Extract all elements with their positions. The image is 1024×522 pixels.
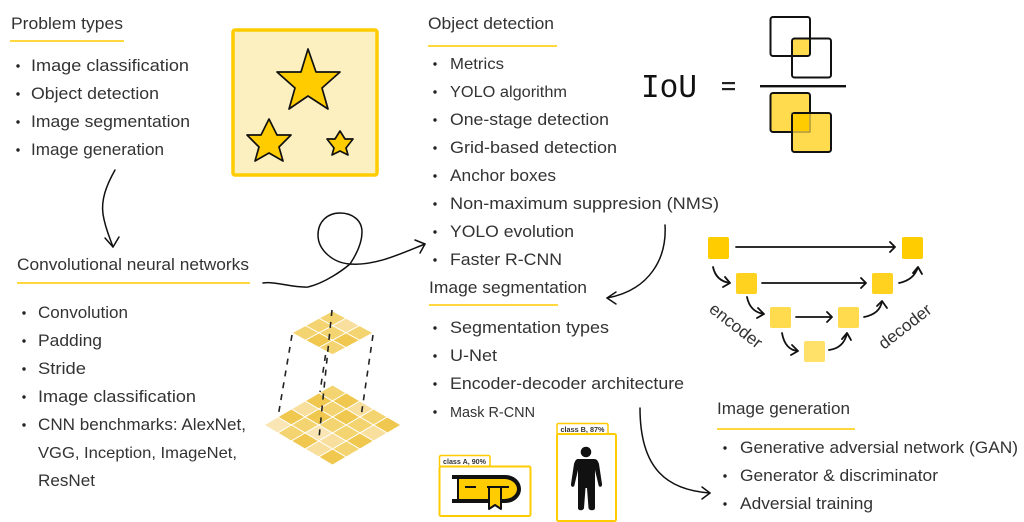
list: CNN topics: Stride xyxy=(38,359,86,378)
heading: image segmentation: Image segmentation xyxy=(429,278,587,297)
list: problem types: Image generation xyxy=(31,140,164,159)
arrow: object detection to segmentation xyxy=(607,225,665,304)
arrow: loop from CNN to object detection xyxy=(263,213,425,287)
list: problem types: Object detection xyxy=(31,84,159,103)
list: image generation topics: Generator & discriminator xyxy=(740,466,938,485)
list: object detection topics: One-stage detection xyxy=(450,110,609,129)
list: segmentation topics: Encoder-decoder architecture xyxy=(450,374,684,393)
heading: image generation: Image generation xyxy=(717,399,850,418)
arrow: segmentation to image generation xyxy=(640,408,710,499)
list: segmentation topics xyxy=(433,318,684,421)
list: problem types xyxy=(16,56,190,159)
list: CNN topics: ResNet xyxy=(38,471,95,490)
heading: image generation xyxy=(717,399,855,429)
list: object detection topics: YOLO algorithm xyxy=(450,84,567,101)
list: image generation topics: Generative adversial network (GAN) xyxy=(740,438,1018,457)
chart: convolution grids xyxy=(264,310,401,465)
union squares xyxy=(770,93,831,152)
heading: object detection xyxy=(428,14,557,46)
formula: IoU: IoU xyxy=(641,70,697,107)
list: CNN topics: VGG, Inception, ImageNet, xyxy=(38,445,237,462)
list: segmentation topics: Segmentation types xyxy=(450,318,609,337)
list: CNN topics: Padding xyxy=(38,331,102,350)
detection box: class B person: class B, 87% xyxy=(560,425,605,434)
formula: IoU xyxy=(641,17,846,152)
heading: convolutional neural networks: Convolutional neural networks xyxy=(17,255,249,274)
detection box: class A book xyxy=(440,456,530,516)
list: CNN topics: CNN benchmarks: AlexNet, xyxy=(38,415,246,434)
list: object detection topics xyxy=(433,56,719,269)
list: object detection topics: Metrics xyxy=(450,56,504,73)
icon: person xyxy=(571,447,602,510)
list: object detection topics: Anchor boxes xyxy=(450,166,556,185)
list: image generation topics xyxy=(723,438,1018,513)
list: image generation topics: Adversial training xyxy=(740,494,873,513)
label: encoder: encoder xyxy=(706,299,766,353)
list: CNN topics: Convolution xyxy=(38,303,128,322)
list: problem types: Image segmentation xyxy=(31,112,190,131)
list: problem types: Image classification xyxy=(31,56,189,75)
detection box: class A book: class A, 90% xyxy=(443,457,486,466)
label: decoder: decoder xyxy=(875,300,936,353)
list: CNN topics: Image classification xyxy=(38,387,196,406)
detection box: class B person xyxy=(557,424,616,521)
icon: book xyxy=(452,475,521,509)
diagram: U-Net encoder decoder xyxy=(706,237,936,362)
list: object detection topics: YOLO evolution xyxy=(450,222,574,241)
bottom grid xyxy=(264,385,401,465)
top grid xyxy=(292,311,373,355)
list: segmentation topics: U-Net xyxy=(450,346,497,365)
list: object detection topics: Grid-based detection xyxy=(450,138,617,157)
heading: problem types xyxy=(10,14,124,41)
list: object detection topics: Non-maximum suppresion (NMS) xyxy=(450,194,719,213)
list: CNN topics xyxy=(22,303,246,490)
list: object detection topics: Faster R-CNN xyxy=(450,250,562,269)
list: segmentation topics: Mask R-CNN xyxy=(450,404,535,421)
heading: object detection: Object detection xyxy=(428,14,554,33)
panel: stars image xyxy=(233,30,377,175)
intersection squares xyxy=(770,17,831,78)
heading: problem types: Problem types xyxy=(11,14,123,33)
projection lines xyxy=(278,310,373,438)
arrow: problem types to CNN xyxy=(103,170,119,247)
